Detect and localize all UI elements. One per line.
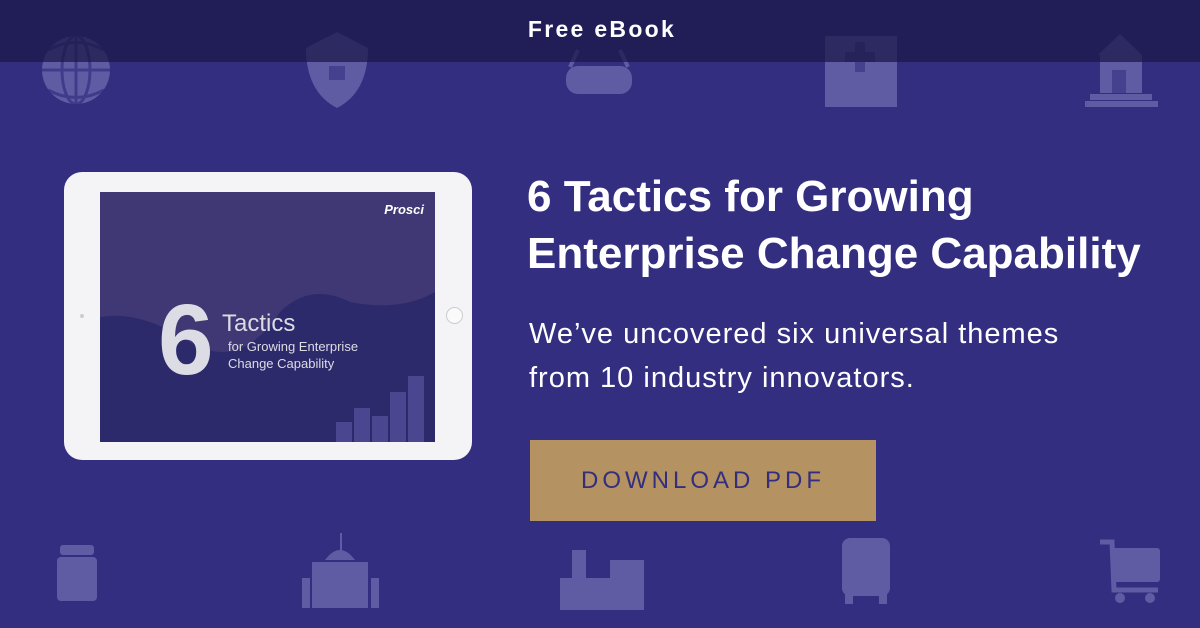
cover title: Tactics: [222, 310, 295, 337]
icon: factory: [560, 550, 644, 610]
logo: Prosci: Prosci: [384, 202, 424, 217]
icon: bus: [842, 538, 890, 604]
title: [527, 172, 1141, 278]
header band: [0, 0, 1200, 62]
subtitle: [529, 318, 1059, 394]
icon: cart: [1100, 542, 1160, 603]
button: download PDF: [530, 440, 876, 521]
tablet screen: Change Capability: [228, 356, 335, 371]
title: Enterprise Change Capability: [527, 229, 1141, 278]
subtitle: We’ve uncovered six universal themes: [529, 318, 1059, 350]
button: download PDF: DOWNLOAD PDF: [581, 467, 825, 494]
icon: glasses: [566, 50, 632, 94]
subtitle: from 10 industry innovators.: [529, 362, 915, 394]
icon: bottle: [57, 545, 97, 601]
icon: bank: [1085, 34, 1158, 107]
tablet screen: for Growing Enterprise: [228, 339, 358, 354]
cover number 6: 6: [158, 284, 214, 396]
tablet mockup: [64, 172, 472, 460]
tablet screen: [100, 192, 435, 442]
icon: hospital: [825, 36, 897, 107]
title: 6 Tactics for Growing: [527, 172, 974, 221]
icon: shield: [306, 32, 368, 108]
icon: globe: [42, 36, 110, 104]
header text: Free eBook: Free eBook: [528, 16, 676, 42]
icon: capitol: [302, 533, 379, 608]
